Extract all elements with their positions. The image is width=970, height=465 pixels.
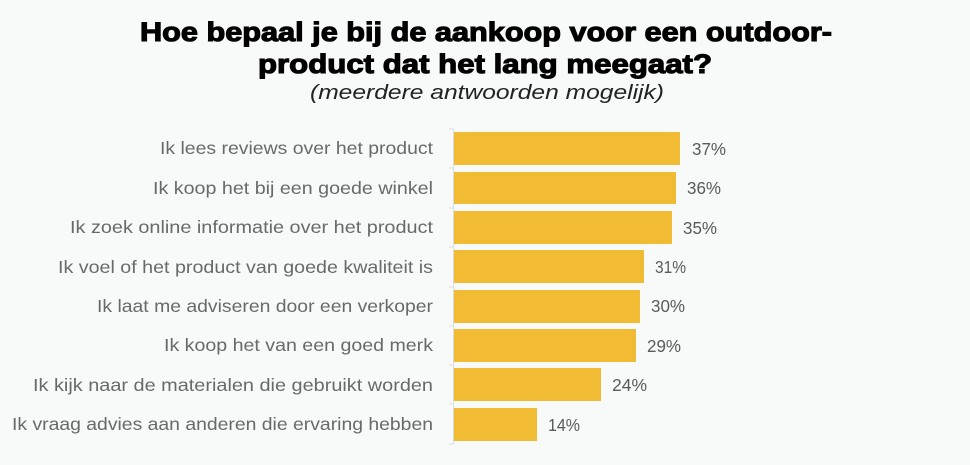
row: winkel 36%: Ik koop het bij een goede winkel	[153, 178, 433, 198]
row: winkel 36%	[153, 172, 721, 204]
row: reviews 37%: 37%	[692, 139, 726, 159]
row: online informatie 35%: 35%	[683, 218, 717, 238]
title	[140, 17, 832, 79]
row: anderen 14%: 14%	[548, 415, 580, 435]
subtitle: (meerdere antwoorden mogelijk)	[310, 81, 664, 104]
row: merk 29%: 29%	[647, 336, 681, 356]
row: winkel 36%: 36%	[687, 178, 721, 198]
row: kwaliteit 31%	[58, 250, 686, 283]
axis with tick marks	[449, 129, 454, 444]
row: online informatie 35%	[70, 211, 717, 244]
row: anderen 14%	[12, 408, 580, 441]
row: verkoper 30%: Ik laat me adviseren door een verkoper	[97, 296, 433, 316]
row: merk 29%: Ik koop het van een goed merk	[164, 335, 433, 355]
row: online informatie 35%: Ik zoek online informatie over het product	[70, 217, 433, 237]
row: anderen 14%: Ik vraag advies aan anderen die ervaring hebben	[12, 414, 433, 434]
row: kwaliteit 31%: 31%	[655, 257, 686, 277]
bar chart	[12, 129, 726, 444]
row: reviews 37%	[160, 132, 726, 165]
row: materialen 24%	[33, 368, 647, 401]
row: materialen 24%: Ik kijk naar de materialen die gebruikt worden	[33, 375, 433, 395]
row: reviews 37%: Ik lees reviews over het product	[160, 138, 433, 158]
row: kwaliteit 31%: Ik voel of het product van goede kwaliteit is	[58, 257, 433, 277]
row: merk 29%	[164, 329, 681, 362]
row: verkoper 30%	[97, 290, 685, 323]
title: product dat het lang meegaat?	[258, 49, 712, 79]
title: Hoe bepaal je bij de aankoop voor een outdoor-	[140, 17, 832, 47]
row: verkoper 30%: 30%	[651, 296, 685, 316]
row: materialen 24%: 24%	[612, 375, 647, 395]
